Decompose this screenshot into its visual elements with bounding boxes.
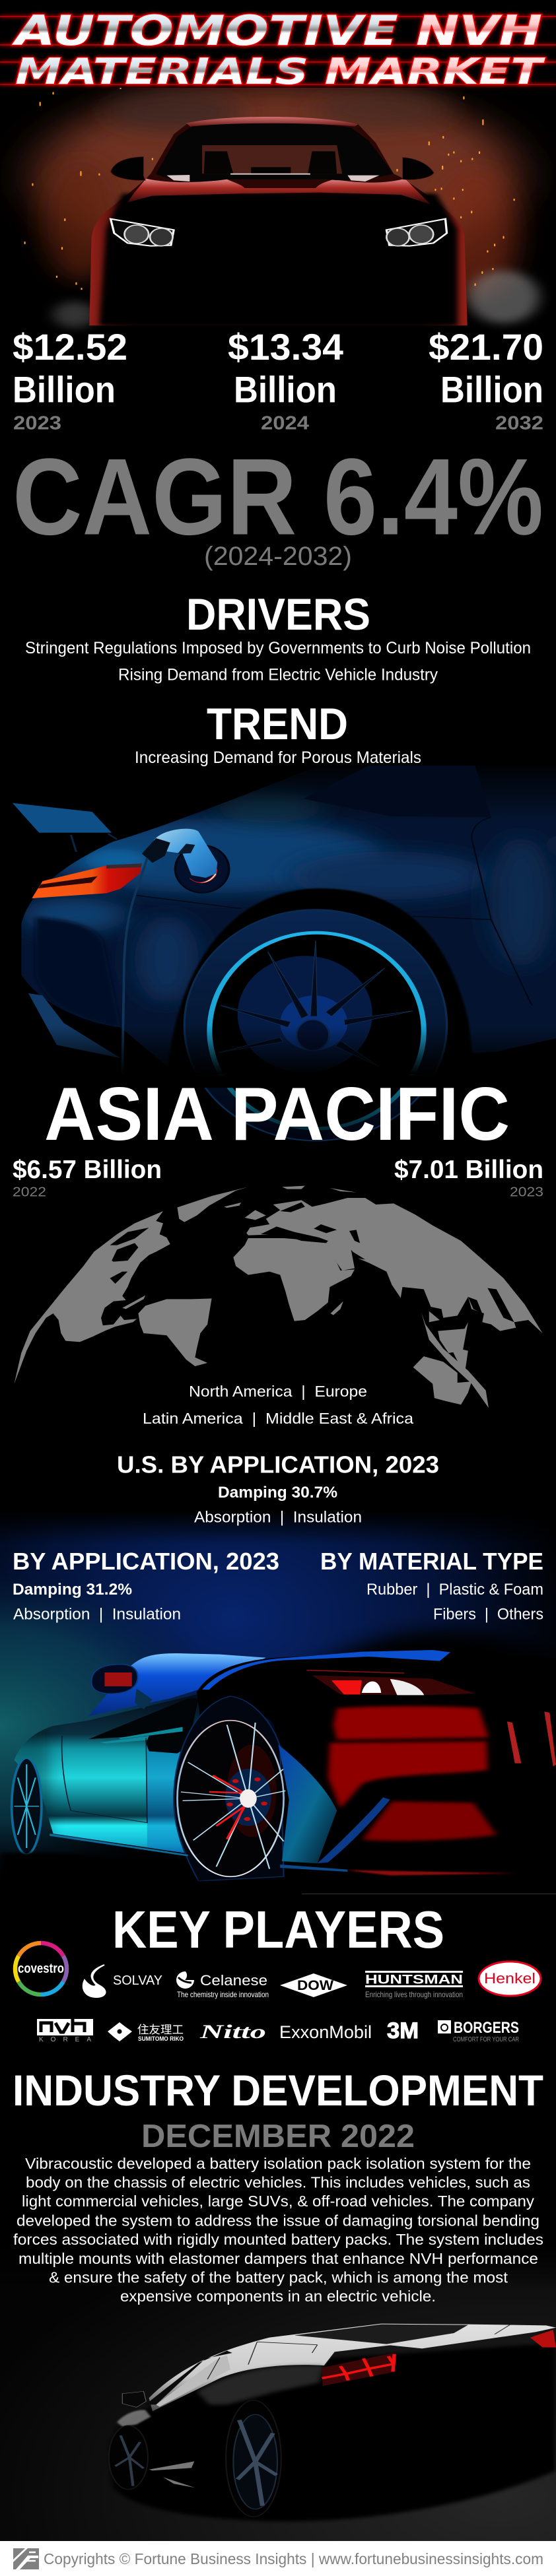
red diffuser (363, 1801, 497, 1841)
mirror (91, 1665, 153, 1709)
stat 2024: Billion (234, 368, 337, 411)
logo: nvh korea (37, 2019, 93, 2043)
right side darkness (259, 1630, 556, 1903)
tail light (307, 1670, 475, 1695)
iceland (224, 1203, 241, 1208)
headlight left (111, 219, 174, 246)
side glass (156, 2355, 230, 2407)
stat 2032 (429, 326, 543, 434)
roof shut lines (207, 2325, 510, 2379)
roof strip (186, 117, 358, 127)
stat 2023 (13, 326, 127, 434)
stat 2024: 2024 (261, 413, 309, 434)
by application: Absorption | Insulation (13, 1605, 181, 1624)
drivers: Rising Demand from Electric Vehicle Industry (118, 665, 438, 684)
drivers (25, 589, 531, 684)
smoke glow (36, 84, 539, 328)
by application (13, 1548, 279, 1624)
stat 2024: $13.34 (228, 326, 343, 368)
rear window glow (202, 145, 342, 174)
panel: company logos (15, 1943, 541, 2043)
by material type: BY MATERIAL TYPE (320, 1548, 543, 1575)
australia (413, 1356, 471, 1404)
door handle (99, 1727, 183, 1744)
body bottom fade (0, 1025, 556, 1074)
trend (135, 699, 421, 767)
heading: december 2022: DECEMBER 2022 (141, 2119, 415, 2154)
by material type (320, 1548, 543, 1624)
wheel arch (166, 888, 475, 1074)
tail light (322, 2353, 396, 2386)
panel: electric car charging (0, 766, 556, 1140)
madagascar (330, 1302, 343, 1315)
development text: forces associated with rigidly mounted battery packs. The system includes (13, 2231, 543, 2248)
CAGR: (2024-2032) (204, 542, 352, 571)
eurasia (246, 1198, 543, 1333)
stat 2032: Billion (440, 368, 543, 411)
logo: borgers: COMFORT FOR YOUR CAR (453, 2036, 519, 2043)
car body (0, 766, 556, 1074)
logo: exxonmobil: ExxonMobil (279, 2022, 372, 2042)
logo: solvay: SOLVAY (113, 1973, 162, 1988)
logo: huntsman: HUNTSMAN (365, 1973, 463, 1987)
spoiler (13, 803, 117, 852)
by material type: Rubber | Plastic & Foam (366, 1581, 543, 1599)
logo: sumitomo riko (108, 2022, 184, 2042)
nose highlight (117, 2410, 151, 2427)
U.S. by application (117, 1451, 439, 1526)
headlight right (386, 219, 447, 246)
rear haunch gradient (197, 2365, 324, 2404)
U.S. by application: U.S. BY APPLICATION, 2023 (117, 1451, 439, 1478)
other regions: Latin America | Middle East & Africa (143, 1410, 413, 1427)
teal backdrop (0, 1511, 556, 1894)
footer logo (13, 2548, 39, 2569)
logo: nitto: Nitto (199, 2021, 266, 2043)
carbon diffuser (28, 993, 121, 1058)
logo: borgers (438, 2019, 519, 2043)
development text: body on the chassis of electric vehicles. This includes vehicles, such as (26, 2174, 530, 2191)
roof panels (149, 2324, 556, 2411)
red rear lower (328, 1741, 487, 1808)
windscreen (156, 123, 394, 182)
backdrop top fade (0, 1511, 556, 1544)
panel: hero car (25, 84, 539, 328)
drivers: DRIVERS (186, 589, 370, 640)
development text: & ensure the safety of the battery pack, which is among the most (49, 2269, 508, 2286)
stat 2032: $21.70 (429, 326, 543, 368)
door shadow (88, 1698, 199, 1754)
panel: blue and red sports car (0, 1630, 556, 1903)
shoulder blue highlight (202, 1650, 450, 1690)
drivers: Stringent Regulations Imposed by Governments to Curb Noise Pollution (25, 639, 531, 657)
logo: celanese: Celanese (200, 1972, 267, 1989)
front wheel (12, 1758, 42, 1854)
mirror (122, 2391, 146, 2407)
title (0, 7, 556, 92)
logo: solvay (83, 1965, 162, 1997)
seas and lakes (110, 1203, 514, 1322)
asia pacific 2022: 2022 (13, 1185, 46, 1200)
title: MATERIALS MARKET (15, 51, 545, 92)
stat 2023: Billion (13, 368, 116, 411)
development text (13, 2155, 543, 2305)
logo: celanese (176, 1971, 269, 1999)
bumper red line (344, 1870, 518, 1876)
bumper blue edge (318, 1797, 390, 1863)
side body (15, 1694, 198, 1853)
image bottom edge (0, 1074, 556, 1088)
charging plug (142, 829, 217, 878)
front wheel (109, 2426, 148, 2490)
indonesia chain (421, 1311, 489, 1408)
globe map (14, 1186, 543, 1408)
title backing (0, 0, 556, 88)
cabin roof (88, 1653, 266, 1716)
trend: Increasing Demand for Porous Materials (135, 748, 421, 767)
logo: covestro: covestro (18, 1962, 64, 1976)
stat 2023: 2023 (13, 413, 61, 434)
logo: henkel (479, 1962, 541, 1996)
sparks (25, 87, 514, 290)
development text: light commercial vehicles, large SUVs, & off-road vehicles. The company (22, 2193, 535, 2210)
logo: nvh korea: KOREA (39, 2036, 91, 2043)
red light streaks (0, 17, 556, 84)
asia pacific 2023: 2023 (510, 1185, 543, 1200)
stat 2032: 2032 (495, 413, 543, 434)
wheel (184, 909, 447, 1140)
rear wheel arch (174, 1696, 284, 1881)
development text: developed the system to address the issue of damaging torsional bending (17, 2212, 539, 2229)
door handle (547, 836, 556, 856)
africa (233, 1238, 355, 1321)
window frame (145, 2351, 232, 2404)
door shut lines (62, 1736, 147, 1823)
U.S. by application: Absorption | Insulation (194, 1509, 362, 1526)
stat 2023: $12.52 (13, 326, 127, 368)
development text: expensive components in an electric vehicle. (120, 2288, 436, 2305)
seats (204, 151, 337, 174)
logo: sumitomo riko: SUMITOMO RIKO (138, 2035, 184, 2042)
development text: Vibracoustic developed a battery isolation pack isolation system for the (25, 2155, 531, 2172)
bumper recess (36, 917, 121, 1028)
panel: footer (0, 2541, 556, 2576)
car body (110, 2343, 556, 2521)
logo: dow: DOW (297, 1978, 333, 1993)
other regions (143, 1383, 413, 1427)
blue backdrop (0, 1511, 556, 1894)
south america (138, 1298, 212, 1366)
reflector marks (507, 1711, 556, 1767)
stat 2024 (228, 326, 343, 434)
sill (50, 1833, 188, 1857)
car silhouette (89, 117, 468, 325)
north america (14, 1211, 170, 1384)
other regions: North America | Europe (189, 1383, 367, 1400)
dash reflections (166, 174, 380, 182)
asia pacific 2022: $6.57 Billion (13, 1156, 162, 1184)
logo: huntsman: Enriching lives through innovation (365, 1990, 463, 1999)
red rear upper (333, 1706, 489, 1740)
by application: BY APPLICATION, 2023 (13, 1548, 279, 1575)
development text: multiple mounts with elastomer dampers that enhance NVH performance (18, 2250, 538, 2267)
backdrop top fade (0, 2244, 556, 2290)
title: AUTOMOTIVE NVH (11, 7, 542, 55)
cable (122, 858, 147, 1074)
logo: sumitomo riko: 住友理工 (137, 2024, 184, 2036)
mirrors (111, 156, 434, 180)
right tail light (530, 2330, 556, 2348)
charging port (175, 845, 229, 893)
logo: 3m: 3M (387, 2018, 419, 2043)
panel: bottom car backdrop (0, 2244, 556, 2541)
hood highlight (127, 179, 431, 205)
bottom rule and fade (0, 1891, 556, 1901)
door shut line (137, 817, 532, 1005)
logo: covestro (15, 1943, 67, 1995)
by material type: Fibers | Others (433, 1605, 543, 1624)
side window (303, 766, 491, 817)
greenland (177, 1187, 248, 1222)
asia pacific 2023 (394, 1156, 543, 1200)
trend: TREND (207, 699, 348, 749)
side sill highlights (149, 2461, 195, 2488)
logo: borgers: BORGERS (454, 2019, 519, 2037)
engine vents (295, 2325, 468, 2344)
arctic russia (282, 1186, 357, 1193)
ground shadow (0, 1853, 284, 1901)
logo: huntsman (365, 1971, 463, 1999)
rear wheel (177, 1721, 285, 1876)
copyright: Copyrights © Fortune Business Insights | www.fortunebusinessinsights.com (44, 2550, 543, 2567)
rear black panel (197, 1650, 556, 1901)
tail light (32, 863, 142, 898)
heading: asia pacific: ASIA PACIFIC (44, 1073, 510, 1156)
rear wheel (226, 2400, 281, 2517)
panel: black sports car (109, 2324, 556, 2521)
asia pacific 2022 (13, 1156, 162, 1200)
logo: celanese: The chemistry inside innovation (177, 1990, 269, 1999)
U.S. by application: Damping 30.7% (218, 1484, 337, 1502)
hood shadow (99, 193, 458, 325)
logo: dow (280, 1973, 347, 1997)
rear quarter panel (279, 1744, 337, 1863)
rear sill (280, 1865, 347, 1872)
by application: Damping 31.2% (13, 1581, 132, 1599)
caribbean islands (122, 1296, 145, 1309)
logo: henkel: Henkel (484, 1970, 536, 1987)
asia pacific 2023: $7.01 Billion (394, 1156, 543, 1184)
uk (245, 1210, 266, 1220)
heading: key players: KEY PLAYERS (112, 1900, 444, 1959)
